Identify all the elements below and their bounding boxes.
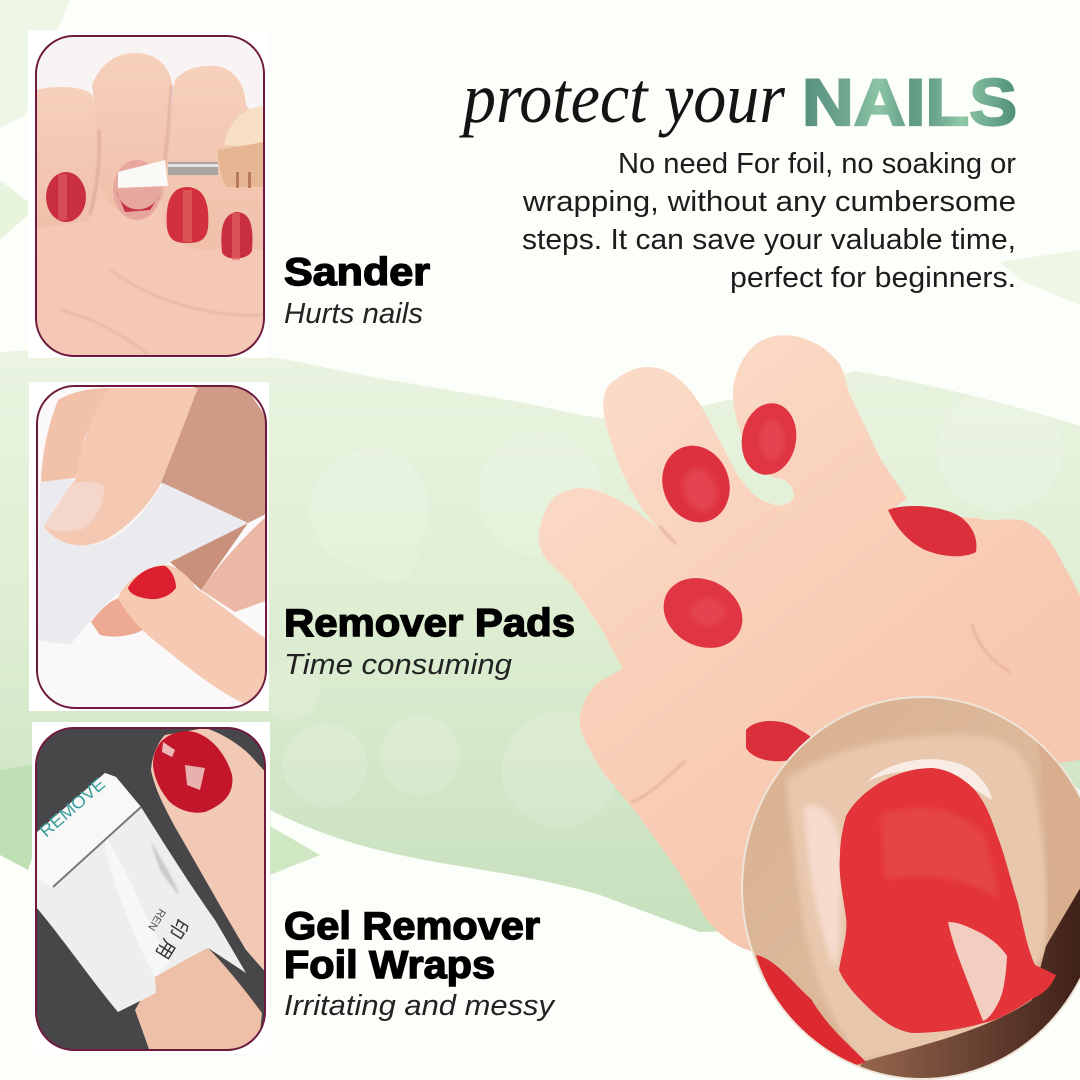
thumbnail (42, 482, 104, 531)
middle finger (92, 53, 172, 215)
label: sander: Sander (284, 251, 430, 294)
label: gel remover foil wraps: Irritating and messy (284, 990, 556, 1022)
back fingertip (91, 598, 143, 637)
exposed nail patch (948, 922, 1007, 1021)
description text: wrapping, without any cumbersome (522, 186, 1016, 218)
panel: sander (28, 30, 268, 358)
title (458, 58, 1017, 139)
third finger (162, 66, 264, 250)
cuticle (867, 759, 992, 800)
label: sander (284, 251, 430, 330)
label: remover pads: Time consuming (284, 649, 512, 681)
drill handle (224, 106, 264, 148)
left finger (36, 87, 100, 228)
red nail (153, 731, 232, 813)
back hand (161, 386, 268, 523)
upper finger (151, 728, 268, 975)
foil label text: REMOVE (36, 774, 109, 841)
lower red nail (756, 955, 866, 1070)
thumb (40, 388, 198, 546)
lower finger (118, 565, 268, 704)
lower finger (135, 948, 262, 1052)
nail: thumb (888, 506, 976, 556)
nail: middle (736, 399, 802, 479)
finger shading (90, 85, 172, 215)
finger shadow (170, 523, 248, 590)
foil body (36, 773, 246, 1012)
pad (38, 478, 248, 645)
label: gel remover foil wraps: Gel Remover (284, 905, 540, 948)
title: protect your (458, 58, 786, 138)
finger flesh (786, 735, 1047, 1060)
panel: foil wraps (32, 722, 270, 1054)
right finger (201, 515, 268, 612)
sanding bit (118, 160, 168, 188)
red nail (128, 566, 176, 599)
palm (36, 180, 264, 356)
panel: remover pads (29, 382, 269, 711)
hand creases (632, 527, 1010, 802)
foil flap (36, 773, 141, 887)
nail: index (652, 436, 740, 532)
label: gel remover foil wraps: Foil Wraps (284, 944, 495, 987)
title: NAILS (802, 65, 1017, 139)
red nail (839, 768, 1056, 1033)
dark gap (850, 880, 1080, 1080)
label: remover pads: Remover Pads (284, 602, 575, 645)
nails (46, 172, 86, 222)
foil print: REN (145, 906, 168, 933)
magnified nail circle (740, 695, 1080, 1080)
label: sander: Hurts nails (284, 298, 423, 330)
panel: foil wraps: 印 用 (151, 914, 192, 963)
palm creases (60, 270, 264, 356)
right finger (1037, 742, 1080, 937)
nail: ring (651, 565, 755, 661)
description text: steps. It can save your valuable time, (522, 224, 1016, 256)
back fingers (41, 388, 110, 482)
hand photo (539, 335, 1080, 951)
description text (522, 148, 1016, 294)
description text: perfect for beginners. (730, 262, 1016, 294)
nail: little (746, 721, 815, 761)
label: gel remover foil wraps (284, 905, 556, 1022)
label: remover pads (284, 602, 575, 681)
description text: No need For foil, no soaking or (618, 148, 1016, 180)
